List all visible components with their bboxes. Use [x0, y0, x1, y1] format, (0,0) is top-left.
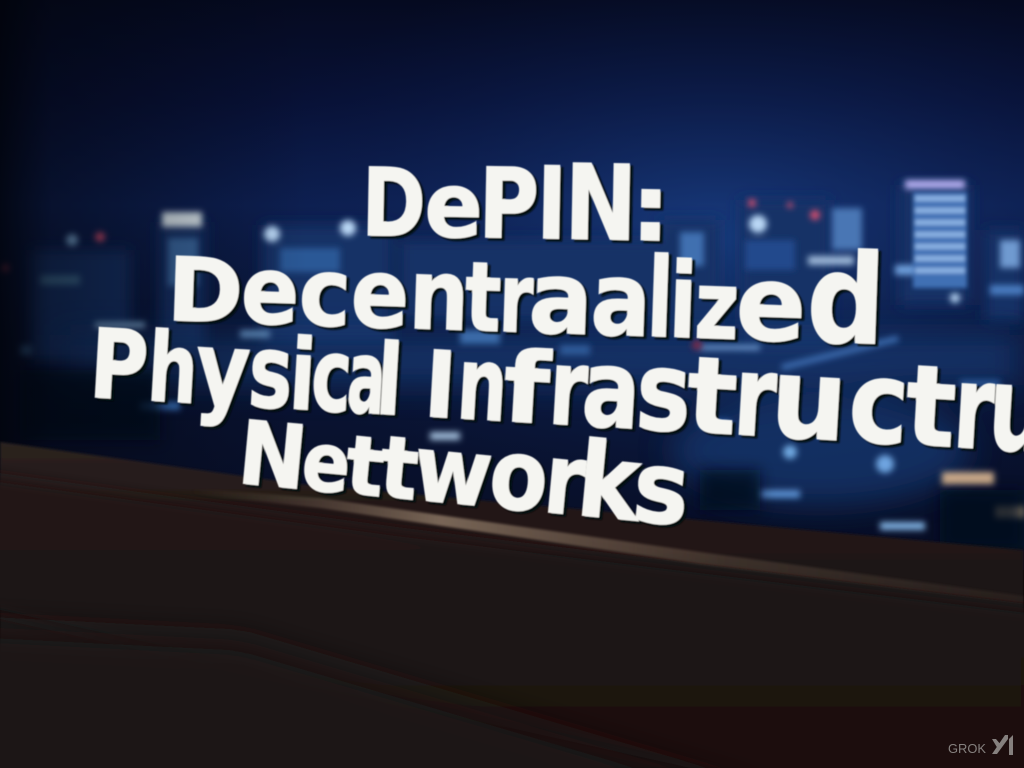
title line 2: c	[297, 238, 353, 349]
title line 3: t	[684, 333, 741, 459]
title line 3: a	[579, 326, 644, 454]
title line 3: i	[286, 318, 319, 434]
blurred city skyline	[1, 180, 1024, 530]
title line 2: a	[589, 240, 653, 361]
title line 3: c	[308, 316, 355, 437]
title line 4	[234, 386, 695, 550]
watermark: GROK: GROK	[948, 741, 986, 756]
title line 4: N	[234, 401, 311, 510]
title line 2: d	[805, 227, 887, 374]
title line 3: f	[500, 331, 554, 447]
bright sill highlight	[190, 488, 1024, 603]
title line 2: a	[527, 239, 595, 358]
title line 3	[86, 287, 1024, 480]
title line 2: t	[463, 241, 503, 354]
title line 4: w	[409, 415, 497, 528]
title line 4: o	[485, 417, 553, 536]
title line 4: s	[628, 427, 695, 549]
title line 2: e	[349, 237, 411, 351]
lit windows	[20, 180, 1024, 530]
title	[86, 138, 1024, 550]
title line 2: i	[667, 240, 699, 362]
title line 3: t	[902, 341, 959, 474]
dark building masses low in the window	[20, 370, 1024, 550]
title line 1: P	[478, 147, 540, 261]
title line 3: I	[421, 331, 459, 440]
title line 3: n	[454, 324, 511, 446]
title line 4: t	[375, 417, 423, 520]
title line 4: e	[298, 414, 355, 513]
title line 3: r	[546, 325, 591, 450]
title line 3: s	[245, 312, 296, 433]
title line 4: k	[572, 418, 648, 546]
city glow	[0, 0, 1024, 570]
title line 2: r	[497, 242, 535, 355]
floor surface	[0, 625, 780, 768]
window sill	[0, 442, 1024, 768]
icon: grok logo	[992, 735, 1013, 755]
title line 3: h	[145, 311, 201, 426]
title line 2: z	[693, 251, 741, 362]
title line 2: e	[734, 242, 808, 366]
title line 1	[361, 138, 672, 265]
title line 2	[165, 206, 887, 374]
night sky background	[0, 0, 1024, 570]
title line 2: n	[407, 238, 471, 354]
title line 2: D	[165, 238, 245, 343]
title line 1: e	[424, 153, 483, 259]
title line 3: u	[767, 333, 851, 467]
title line 1: :	[630, 155, 671, 262]
bright tower with window rows	[913, 192, 967, 288]
title line 3: a	[344, 318, 389, 439]
title line 1: I	[536, 145, 568, 263]
sill front face	[0, 475, 1024, 768]
title line 4: r	[539, 422, 590, 539]
title line 1: D	[361, 149, 426, 259]
watermark: GROK	[948, 735, 1013, 756]
title line 3: y	[192, 309, 253, 431]
title line 3: c	[845, 335, 913, 471]
title line 3: r	[730, 331, 780, 463]
title line 3: r	[950, 340, 998, 477]
title line 1: N	[564, 142, 638, 265]
title line 2: e	[239, 236, 301, 347]
title line 3: P	[87, 308, 151, 423]
title line 3: s	[633, 326, 695, 457]
title line 2: l	[645, 234, 675, 363]
title line 4: t	[342, 418, 388, 516]
title line 3: l	[373, 323, 406, 439]
